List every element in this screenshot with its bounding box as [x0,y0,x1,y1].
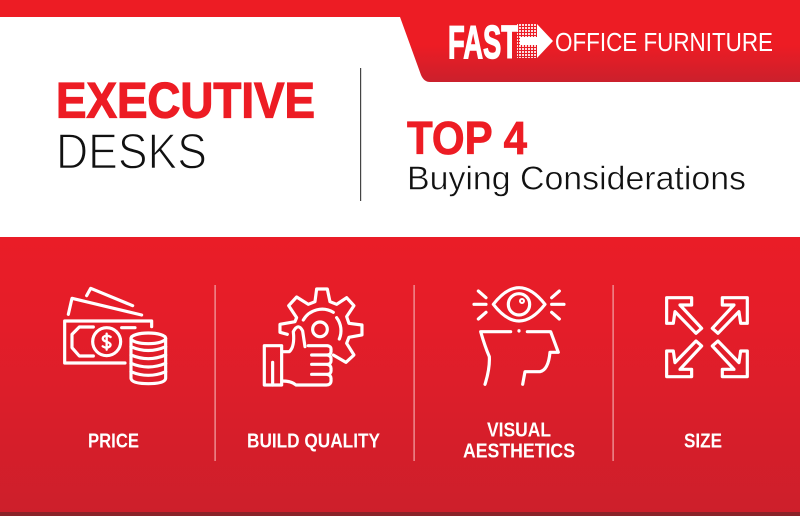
header banner [0,0,800,82]
label: Build Quality: BUILD QUALITY [247,430,381,452]
icon: four expanding arrows [667,298,747,377]
label: Visual Aesthetics: AESTHETICS [463,440,575,462]
red panel: considerations [0,237,800,516]
subtitle: Top 4 Buying Considerations: Buying Considerations [407,160,746,196]
label: Visual Aesthetics [463,420,575,462]
subtitle: Top 4 Buying Considerations [407,112,746,196]
logo: Fast Office Furniture [448,16,773,68]
title: Executive Desks: EXECUTIVE [56,72,315,128]
icon: thumb up and gear [264,289,362,385]
title: Executive Desks: DESKS [56,124,207,180]
icon: money and coins [65,288,166,384]
subtitle: Top 4 Buying Considerations: TOP 4 [407,112,527,164]
label: Price: PRICE [88,430,139,452]
heading divider [360,68,361,201]
icon: eye above head [474,288,564,384]
label: Visual Aesthetics: VISUAL [487,420,551,442]
label: Size: SIZE [684,430,722,452]
title: Executive Desks [56,72,315,180]
logo: Fast Office Furniture: FAST [448,16,518,68]
logo: Fast Office Furniture: OFFICE FURNITURE [555,29,773,57]
